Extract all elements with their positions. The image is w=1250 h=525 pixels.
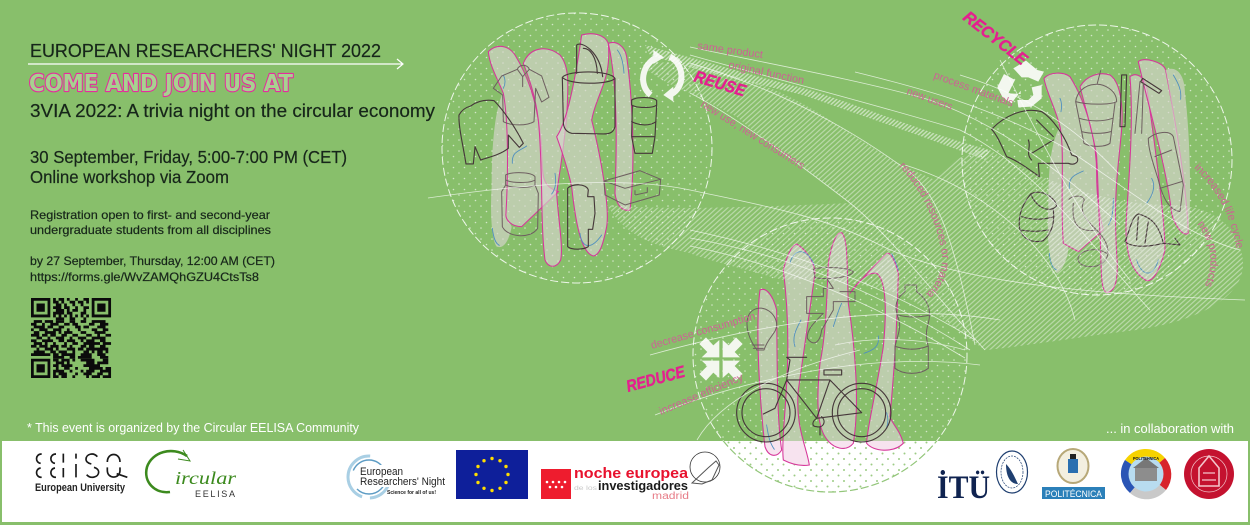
logo: Sant'Anna School seal — [1184, 449, 1234, 499]
date and time: 30 September, Friday, 5:00-7:00 PM (CET) — [30, 147, 347, 167]
icon: carrier bag — [1148, 132, 1183, 212]
icon: bicycle — [737, 357, 891, 442]
logo: Politecnica de Madrid: POLITÉCNICA — [1045, 489, 1103, 500]
labels: reuse: new use, new consumers — [698, 98, 807, 172]
logo: Circular EELISA: ircular — [175, 468, 237, 488]
reduce dotted disc on white — [722, 441, 938, 493]
registration text: undergraduate students from all disciplines — [30, 223, 271, 237]
labels: reduce: increase efficiency — [657, 371, 745, 418]
labels: reuse: REUSE — [692, 68, 749, 101]
reduce blobs on white — [764, 441, 904, 466]
reduce blobs on green — [758, 233, 903, 465]
logo: Politehnica seal: POLITEHNICA — [1133, 456, 1160, 461]
organizer note: * This event is organized by the Circular EELISA Community — [27, 421, 360, 435]
registration deadline and link — [30, 254, 275, 284]
labels: reduce: decrease consumption — [650, 311, 757, 352]
recycle dotted disc — [962, 25, 1232, 295]
logo: ITU — [937, 451, 1028, 506]
reuse dotted disc — [442, 13, 712, 283]
labels: recycle: new users — [905, 86, 955, 113]
location: Online workshop via Zoom — [30, 167, 229, 187]
icon: water bottle — [568, 185, 595, 249]
event title: 3VIA 2022: A trivia night on the circular economy — [30, 100, 436, 121]
logo: Circular EELISA — [146, 450, 237, 499]
icon: water tap — [807, 268, 855, 343]
labels: recycle: process materials — [932, 70, 1015, 110]
registration deadline and link: https://forms.gle/WvZAMQhGZU4CtsTs8 — [30, 270, 259, 284]
logo strip panel — [2, 441, 1248, 522]
fine flow lines — [428, 47, 1245, 440]
logo: EELISA European University — [35, 454, 127, 494]
labels: reuse — [692, 40, 807, 172]
EELISA mark — [37, 454, 127, 477]
icon: reuse cycle arrows — [643, 50, 681, 102]
icon: reduce arrows — [699, 337, 743, 381]
icon: light bulb — [747, 308, 777, 350]
icon: tumbler — [632, 98, 657, 153]
icon: crumpled plastic bag — [992, 110, 1078, 177]
icon: glass jar — [502, 173, 538, 236]
panel: reduce circle — [693, 218, 967, 492]
logo: noche europea de los investigadores madrid: investigadores — [598, 478, 688, 493]
logo: European Researchers' Night: Science for all of us! — [387, 490, 436, 496]
logo: Politehnica seal — [1121, 449, 1171, 499]
labels: recycle: new products — [1198, 221, 1218, 287]
logo: European Researchers' Night — [348, 456, 448, 498]
panel: recycle circle — [962, 25, 1232, 295]
panel: reuse circle — [442, 13, 712, 283]
icon: glass bottle — [1069, 196, 1108, 267]
icon: plastic bottle — [895, 285, 930, 373]
reuse blobs and objects — [459, 34, 661, 266]
logo: noche europea de los investigadores madrid: de los — [574, 485, 598, 492]
icon: takeaway cup — [1076, 71, 1117, 146]
labels: recycle: RECYCLE — [960, 8, 1031, 70]
logo: EU flag — [456, 450, 528, 499]
logo: noche europea de los investigadores madrid: madrid — [652, 491, 689, 502]
icon: lunch box — [604, 171, 661, 205]
icon: crushed can — [1019, 192, 1057, 241]
logo: noche europea de los investigadores madrid: noche europea — [574, 465, 689, 482]
labels: recycle — [900, 8, 1243, 297]
hatched flow ribbons between circles — [607, 45, 1243, 350]
icon: plastic wrap — [1125, 214, 1180, 246]
title: EUROPEAN RESEARCHERS' NIGHT 2022 — [30, 40, 381, 61]
registration deadline and link: by 27 September, Thursday, 12:00 AM (CET) — [30, 254, 275, 268]
logo: noche europea de los investigadores madrid — [541, 452, 720, 502]
reduce dotted disc on green — [692, 218, 968, 441]
logo: EELISA European University: European University — [35, 482, 126, 494]
arrow under title — [28, 59, 403, 69]
recycle blobs and objects — [992, 60, 1190, 293]
icon: recycle arrows — [997, 61, 1044, 107]
registration text: Registration open to first- and second-year — [30, 208, 270, 222]
registration text — [30, 208, 271, 237]
logo: Politecnica de Madrid — [1042, 449, 1105, 500]
subheading: come and join us at: COME AND JOIN US AT — [29, 71, 293, 97]
QR code — [31, 299, 111, 377]
icon: straws — [1120, 75, 1162, 127]
collaboration note: ... in collaboration with — [1106, 422, 1234, 436]
logo: European Researchers' Night: Researchers' Night — [360, 476, 445, 488]
labels: recycle: increased life cycle — [1194, 162, 1243, 248]
reduce objects — [737, 252, 930, 449]
labels: reduce — [624, 311, 757, 418]
icon: polo shirt — [493, 65, 549, 125]
labels: reduce: REDUCE — [624, 363, 688, 396]
logo: European Researchers' Night: European — [360, 466, 403, 478]
logo: ITU: İTÜ — [937, 468, 990, 506]
labels: reuse: original function — [727, 59, 805, 87]
logo: Circular EELISA: EELISA — [195, 489, 235, 499]
labels: reuse: same product — [697, 40, 764, 61]
icon: tote bag — [562, 44, 615, 134]
icon: sweatshirt — [459, 100, 523, 164]
